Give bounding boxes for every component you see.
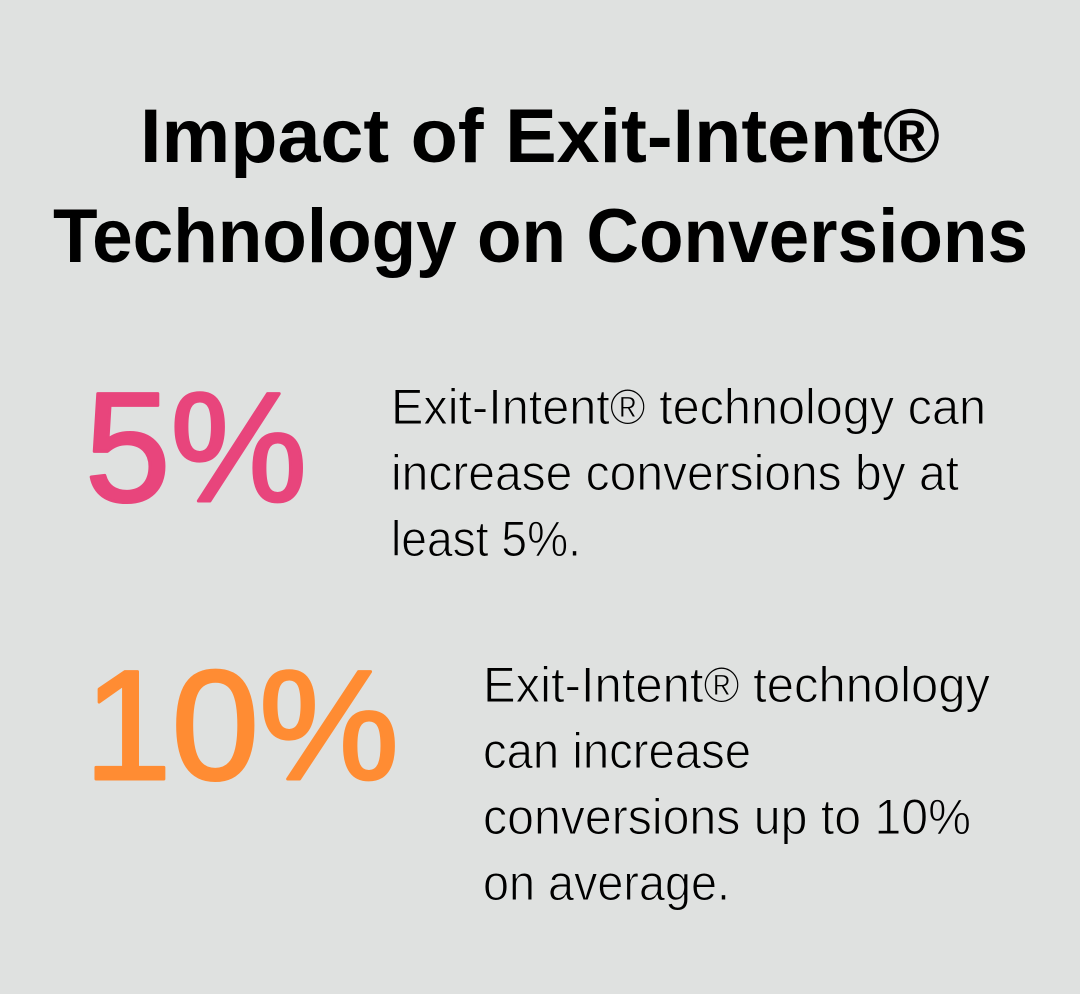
description: 10%: conversions up to 10% (483, 789, 971, 845)
description: 5%: increase conversions by at (391, 445, 959, 501)
stat: 5% (85, 361, 986, 567)
description: 10%: Exit-Intent® technology (483, 657, 990, 713)
stat: 10% (84, 639, 990, 911)
description: 5% (391, 379, 986, 567)
description: 5%: least 5%. (391, 511, 581, 567)
description: 10%: can increase (483, 723, 751, 779)
title: Technology on Conversions (53, 194, 1028, 279)
number: 5%: 5% (85, 361, 307, 535)
number: 10%: 10% (84, 639, 399, 813)
description: 5%: Exit-Intent® technology can (391, 379, 986, 435)
description: 10% (483, 657, 990, 911)
description: 10%: on average. (483, 855, 730, 911)
title (53, 94, 1028, 279)
title: Impact of Exit-Intent® (140, 94, 940, 179)
